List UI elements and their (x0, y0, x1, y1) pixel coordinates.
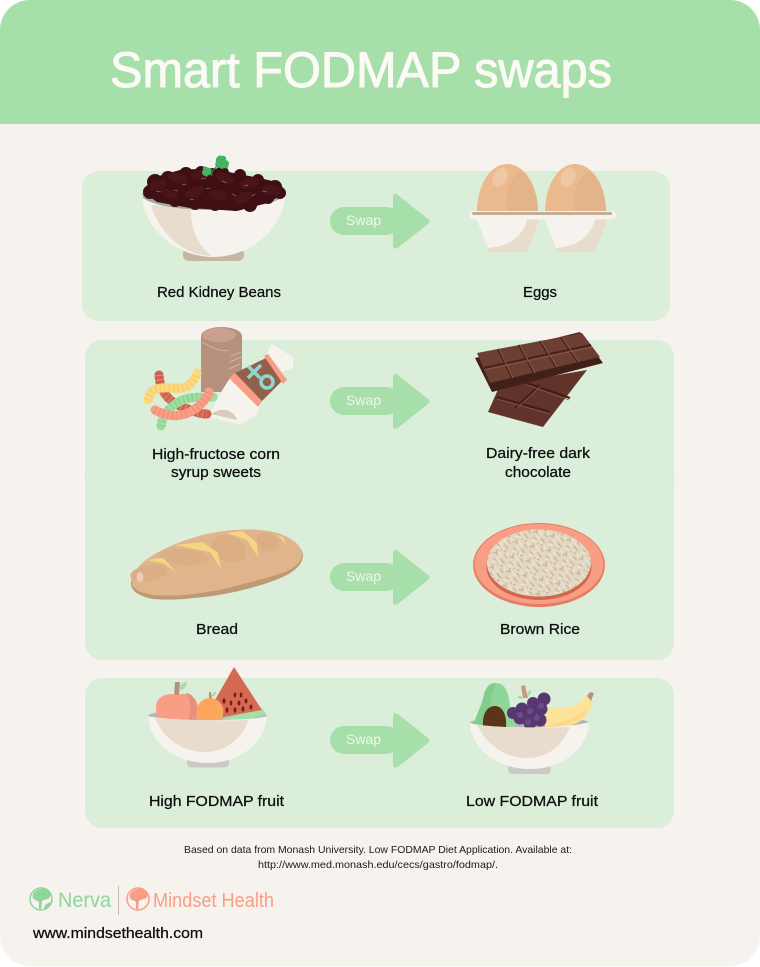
panel: beans to eggs (82, 155, 670, 321)
label: high-fructose corn syrup sweets: syrup sweets (171, 465, 261, 481)
source note: http://www.med.monash.edu/cecs/gastro/fodmap/. (258, 859, 498, 871)
arrow: swap (330, 194, 430, 249)
arrow: swap: Swap (346, 731, 381, 747)
icon: sweets (148, 327, 293, 426)
icon: bowl of high FODMAP fruit (148, 667, 267, 768)
label: low FODMAP fruit: Low FODMAP fruit (466, 794, 598, 810)
arrow: swap: Swap (346, 392, 381, 408)
panel: fruit swap (85, 667, 674, 828)
arrow: swap: Swap (346, 212, 381, 228)
logo: Nerva (30, 888, 111, 912)
label: red kidney beans: Red Kidney Beans (157, 285, 281, 301)
panel: sweets to chocolate and bread to rice (85, 327, 674, 660)
icon: plate of brown rice (473, 523, 605, 607)
label: bread: Bread (196, 622, 238, 638)
source note: Based on data from Monash University. Low FODMAP Diet Application. Available at: (184, 844, 572, 856)
icon: dark chocolate (475, 332, 603, 427)
icon: bowl of red kidney beans (142, 155, 286, 261)
arrow: swap: Swap (346, 568, 381, 584)
label: eggs: Eggs (523, 285, 557, 301)
label: dairy-free dark chocolate: chocolate (505, 465, 571, 481)
icon: bread loaf (129, 529, 303, 600)
icon: bowl of low FODMAP fruit (470, 683, 594, 774)
arrow: swap (330, 713, 430, 768)
arrow: swap (330, 374, 430, 429)
label: brown rice: Brown Rice (500, 622, 580, 638)
label: high FODMAP fruit: High FODMAP fruit (149, 794, 284, 810)
logo: Mindset Health: Mindset Health (153, 890, 274, 912)
label: dairy-free dark chocolate (486, 446, 591, 481)
logo: Nerva: Nerva (58, 889, 111, 912)
icon: eggs in carton (469, 164, 616, 252)
website: www.mindsethealth.com (32, 926, 203, 942)
divider (118, 886, 119, 915)
title: Smart FODMAP swaps (110, 42, 612, 98)
header band (0, 0, 760, 124)
label: high-fructose corn syrup sweets (152, 447, 280, 481)
source note (184, 844, 572, 871)
arrow: swap (330, 550, 430, 605)
label: high-fructose corn syrup sweets: High-fructose corn (152, 447, 280, 463)
label: dairy-free dark chocolate: Dairy-free dark (486, 446, 591, 462)
